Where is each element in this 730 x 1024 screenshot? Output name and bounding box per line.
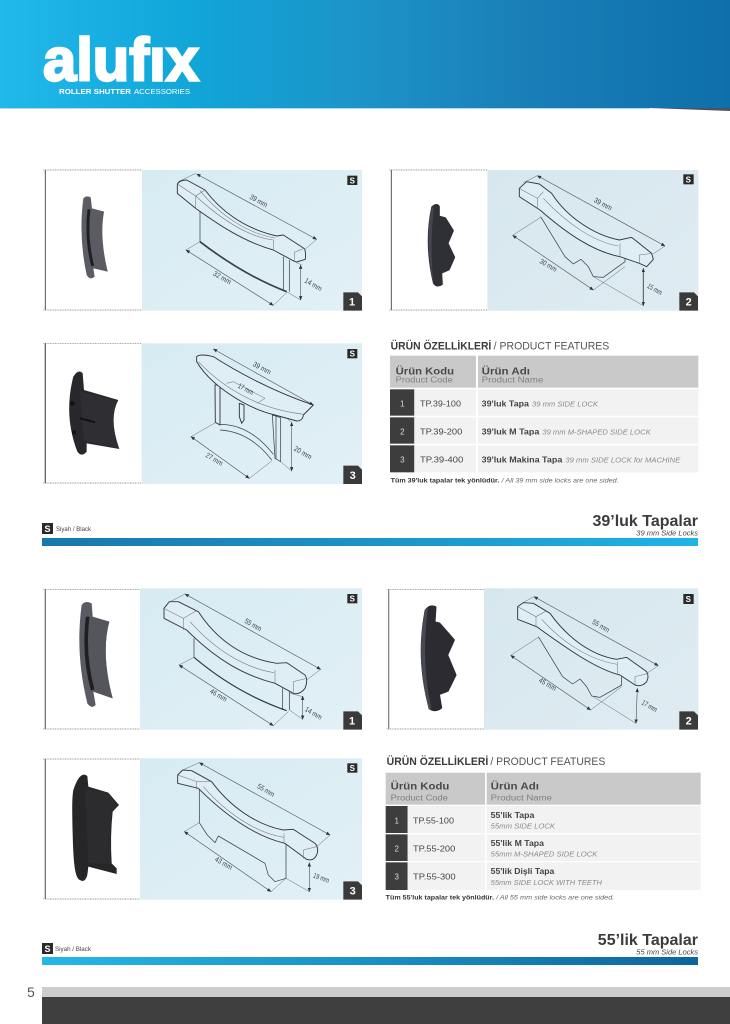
footnote: / All 39 mm side locks are one sided. <box>501 478 619 485</box>
colour key: black 39 <box>42 523 92 534</box>
badge: S: S <box>686 595 692 604</box>
table row 2 <box>390 417 698 444</box>
heading: product features <box>387 755 605 768</box>
badge: number 2 <box>679 711 698 730</box>
badge: number 1 <box>343 292 362 311</box>
section title: 55'lik Tapalar <box>598 932 698 956</box>
badge: number 1: 1 <box>349 297 355 309</box>
table header <box>386 773 701 805</box>
footnote <box>386 895 614 902</box>
table row 2: 2 <box>400 427 405 436</box>
table header: Ürün Kodu <box>396 364 454 377</box>
drawing: side lock 3 with dimensions: 43 mm <box>213 855 234 872</box>
drawing: side lock 2 with dimensions: 39 mm <box>592 195 614 213</box>
section bar 39 <box>42 538 698 546</box>
header band <box>0 0 730 111</box>
badge: number 1 <box>343 711 362 730</box>
table header: Ürün Kodu <box>391 779 449 792</box>
table header: Product Code <box>391 794 449 803</box>
logo: alufix: ACCESSORIES <box>134 89 190 96</box>
badge: S: S <box>350 764 356 773</box>
table row 2: 39'luk M Tapa <box>482 427 540 436</box>
table row 3: 39 mm SIDE LOCK for MACHINE <box>565 457 681 464</box>
table row 3: 55'lik Dişli Tapa <box>491 867 555 876</box>
page number: 5 <box>27 984 35 1000</box>
colour key: black 55: S <box>44 944 51 954</box>
table row 1: TP.39-100 <box>420 399 462 408</box>
table row 1 <box>386 806 701 833</box>
drawing: side lock 1 with dimensions: 55 mm <box>243 616 263 633</box>
heading: product features: / PRODUCT FEATURES <box>490 756 605 768</box>
drawing: side lock 3 with dimensions <box>178 763 331 892</box>
footnote <box>391 478 619 485</box>
heading: product features: / PRODUCT FEATURES <box>494 341 609 353</box>
drawing: side lock 2 with dimensions: 45 mm <box>537 676 558 693</box>
table row 2: 55mm M-SHAPED SIDE LOCK <box>491 852 598 859</box>
table header <box>390 356 698 388</box>
badge: S <box>347 349 357 359</box>
footer band <box>42 987 730 1024</box>
logo: alufix: alufıx <box>43 26 199 94</box>
section title: 39'luk Tapalar: 39’luk Tapalar <box>592 513 698 530</box>
drawing: side lock 2 with dimensions: 30 mm <box>538 257 559 274</box>
panel: 55 mm product 1 <box>43 588 362 730</box>
footnote: Tüm 39'luk tapalar tek yönlüdür. <box>391 478 499 485</box>
table row 2: TP.39-200 <box>420 427 463 436</box>
drawing: side lock 3 with dimensions: 27 mm <box>204 451 225 468</box>
table row 1: 1 <box>400 399 405 408</box>
section bar 55 <box>42 957 698 965</box>
badge: number 2: 2 <box>686 716 692 728</box>
colour key: black 39: S <box>44 524 51 534</box>
drawing: side lock 2 with dimensions <box>511 597 659 723</box>
panel: 39 mm product 2 <box>389 170 698 311</box>
drawing: side lock 3 with dimensions: 39 mm <box>251 359 273 377</box>
drawing: side lock 2 with dimensions: 55 mm <box>591 617 611 634</box>
badge: number 3: 3 <box>350 886 356 898</box>
badge: S <box>683 594 694 604</box>
badge: number 1: 1 <box>349 716 355 728</box>
colour key: black 55 <box>42 943 92 954</box>
table row 3: 3 <box>400 455 405 464</box>
drawing: side lock 3 with dimensions: 55 mm <box>256 782 276 799</box>
section title: 55'lik Tapalar: 55’lik Tapalar <box>598 932 698 949</box>
table row 2 <box>386 834 701 861</box>
colour key: black 39: Siyah / Black <box>56 526 92 533</box>
badge: S <box>347 594 357 604</box>
drawing: side lock 1 with dimensions <box>177 173 324 305</box>
table row 1: 55'lik Tapa <box>491 811 535 820</box>
drawing: side lock 2 with dimensions <box>513 176 665 306</box>
panel: 39 mm product 1 <box>43 170 362 311</box>
table row 1: TP.55-100 <box>413 817 455 826</box>
photo: side lock 1 <box>79 602 113 707</box>
table row 3 <box>390 445 698 472</box>
table: 55 mm product features <box>386 755 701 902</box>
heading: product features: ÜRÜN ÖZELLİKLERİ <box>387 755 488 768</box>
table row 1: 55mm SIDE LOCK <box>491 824 555 831</box>
table row 3: TP.39-400 <box>420 455 464 464</box>
table row 3: 39'luk Makina Tapa <box>482 455 563 464</box>
table row 3: TP.55-300 <box>413 872 456 881</box>
badge: number 3 <box>343 881 362 900</box>
heading: product features <box>391 340 609 353</box>
table header: Product Name <box>482 376 544 385</box>
drawing: side lock 1 with dimensions: 14 mm <box>303 705 324 722</box>
badge: number 2 <box>679 292 698 311</box>
badge: S: S <box>686 175 692 184</box>
table row 3: 55mm SIDE LOCK WITH TEETH <box>491 880 603 887</box>
drawing: side lock 3 with dimensions: 17 mm <box>236 381 255 397</box>
drawing: side lock 1 with dimensions <box>164 594 324 726</box>
drawing: side lock 1 with dimensions: 46 mm <box>208 687 229 704</box>
photo: side lock 2 <box>421 607 455 710</box>
table header: Product Name <box>491 794 553 803</box>
logo: alufix: ROLLER SHUTTER <box>59 89 131 96</box>
table header: Ürün Adı <box>482 364 530 377</box>
section title: 39'luk Tapalar <box>592 513 698 538</box>
badge: S: S <box>350 176 356 185</box>
drawing: side lock 2 with dimensions: 17 mm <box>640 698 659 714</box>
badge: S: S <box>350 350 356 359</box>
table row 1: 1 <box>394 817 399 826</box>
panel: 39 mm product 3 <box>43 343 362 484</box>
drawing: side lock 3 with dimensions: 20 mm <box>292 444 314 461</box>
table row 1: 39'luk Tapa <box>482 399 530 408</box>
badge: number 2: 2 <box>686 297 692 309</box>
table row 1 <box>390 389 698 416</box>
badge: S <box>347 763 357 773</box>
photo: side lock 3 <box>72 775 119 881</box>
section title: 39'luk Tapalar: 39 mm Side Locks <box>636 528 698 538</box>
drawing: side lock 1 with dimensions: 32 mm <box>212 269 233 286</box>
drawing: side lock 2 with dimensions: 15 mm <box>646 281 664 297</box>
table header: Product Code <box>396 376 453 385</box>
badge: S <box>347 176 357 185</box>
photo: side lock 2 <box>428 205 454 285</box>
table: 39 mm product features <box>390 340 698 485</box>
colour key: black 55: Siyah / Black <box>55 946 92 953</box>
table row 2: 39 mm M-SHAPED SIDE LOCK <box>542 429 651 436</box>
table row 1: 39 mm SIDE LOCK <box>532 401 598 408</box>
drawing: side lock 3 with dimensions: 19 mm <box>312 871 331 885</box>
badge: number 3 <box>343 466 362 484</box>
table header: Ürün Adı <box>491 779 539 792</box>
section title: 55'lik Tapalar: 55 mm Side Locks <box>636 948 698 956</box>
table row 3: 3 <box>394 872 399 881</box>
table row 3 <box>386 862 701 890</box>
badge: number 3: 3 <box>350 470 356 482</box>
table row 2: 2 <box>394 844 399 853</box>
footnote: / All 55 mm side locks are one sided. <box>495 895 614 902</box>
table row 2: 55'lik M Tapa <box>491 839 545 848</box>
table row 2: TP.55-200 <box>413 844 456 853</box>
photo: side lock 3 <box>69 371 119 455</box>
drawing: side lock 3 with dimensions <box>191 349 314 478</box>
photo: side lock 1 <box>81 196 108 278</box>
drawing: side lock 1 with dimensions: 14 mm <box>303 276 324 293</box>
heading: product features: ÜRÜN ÖZELLİKLERİ <box>391 340 491 353</box>
panel: 55 mm product 2 <box>387 588 698 730</box>
drawing: side lock 1 with dimensions: 39 mm <box>248 192 269 209</box>
footnote: Tüm 55'luk tapalar tek yönlüdür. <box>386 895 494 902</box>
badge: S <box>683 174 694 184</box>
badge: S: S <box>350 595 356 604</box>
panel: 55 mm product 3 <box>43 758 362 900</box>
